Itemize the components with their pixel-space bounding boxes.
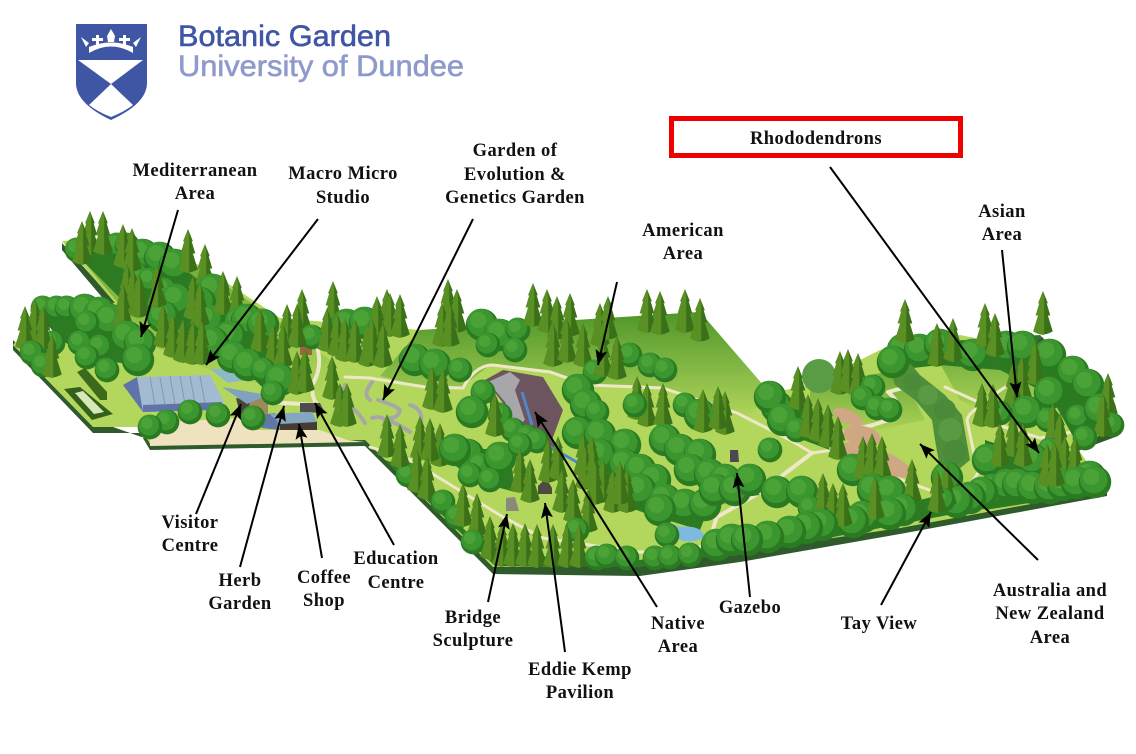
trees: upper and western forest: [15, 211, 397, 439]
label: Mediterranean Area: Area: [175, 184, 215, 204]
building: coffee shop: [260, 412, 317, 430]
label: Herb Garden: [208, 406, 284, 614]
label: Bridge Sculpture: [433, 514, 513, 651]
label: Tay View: Tay View: [841, 614, 917, 634]
label: Eddie Kemp Pavilion: Pavilion: [546, 683, 614, 703]
label: Asian Area: [978, 202, 1026, 397]
plaza and car park: [150, 418, 365, 446]
meadow: east lawn shading: [810, 370, 925, 440]
label: Coffee Shop: [297, 424, 351, 611]
meadow: left hillside shading: [70, 245, 330, 400]
label: Macro Micro Studio: [206, 164, 398, 365]
trees: central garden: [362, 279, 766, 570]
label: Garden of Evolution and Genetics Garden: Genetics Garden: [445, 188, 585, 208]
great hedge: [888, 357, 970, 470]
label: Native Area: Area: [658, 637, 698, 657]
illustrated garden map: [13, 211, 1124, 576]
label: Tay View: [841, 512, 931, 634]
meadow: Asian area lawn: [930, 345, 1100, 420]
label: Native Area: [535, 412, 705, 657]
building: education centre: [300, 403, 325, 413]
label: Bridge Sculpture: Bridge: [445, 608, 501, 628]
specimen tree: [802, 359, 836, 393]
label: Australia and New Zealand Area: Area: [1030, 628, 1070, 648]
label: Asian Area: Asian: [978, 202, 1026, 222]
label: Gazebo: Gazebo: [719, 598, 781, 618]
label: Asian Area: Area: [982, 225, 1022, 245]
label: Visitor Centre: Visitor: [162, 513, 218, 533]
formal garden: [64, 368, 113, 420]
genetics garden walls: [344, 382, 421, 432]
label: Australia and New Zealand Area: [920, 444, 1107, 648]
label: Herb Garden: Herb: [219, 571, 261, 591]
label: Garden of Evolution and Genetics Garden: Evolution &: [464, 165, 566, 185]
label: Visitor Centre: [162, 404, 241, 556]
label: Coffee Shop: Shop: [303, 591, 345, 611]
label: Bridge Sculpture: Sculpture: [433, 631, 513, 651]
meadow: upper lawn shading: [380, 312, 770, 420]
label: Rhododendrons highlighted: Rhododendrons: [750, 129, 882, 149]
label: American Area: Area: [663, 244, 703, 264]
pond near glasshouse: [210, 369, 246, 383]
label: Australia and New Zealand Area: Australia and: [993, 581, 1107, 601]
label: Garden of Evolution and Genetics Garden: [383, 141, 585, 400]
label: Herb Garden: Garden: [208, 594, 272, 614]
label: Rhododendrons highlighted: [672, 118, 1039, 453]
ground edge: [13, 243, 1122, 576]
label: Visitor Centre: Centre: [162, 536, 218, 556]
building: visitor centre: [222, 387, 268, 416]
heading: University of Dundee: University of Dundee: [178, 50, 464, 83]
label: Gazebo: [719, 473, 781, 618]
boulders: [831, 404, 916, 484]
label: Coffee Shop: Coffee: [297, 568, 351, 588]
icon: university shield: [76, 24, 147, 120]
label: Macro Micro Studio: Studio: [316, 188, 370, 208]
label: Native Area: Native: [651, 614, 705, 634]
label: Australia and New Zealand Area: New Zealand: [995, 604, 1105, 624]
pond: [658, 518, 704, 541]
paths: [268, 350, 1092, 552]
label: American Area: [598, 221, 724, 365]
label: Eddie Kemp Pavilion: [528, 503, 632, 703]
trees: eastern garden: [731, 291, 1124, 556]
label: Macro Micro Studio: Macro Micro: [288, 164, 398, 184]
label: Mediterranean Area: [132, 161, 258, 337]
dark forest masses: [20, 240, 1120, 567]
label: Mediterranean Area: Mediterranean: [132, 161, 258, 181]
label: Education Centre: Education: [353, 549, 439, 569]
heading: Botanic Garden: Botanic Garden: [178, 20, 391, 53]
label: American Area: American: [642, 221, 724, 241]
logo: Botanic Garden University of Dundee: [76, 20, 464, 120]
building: pavilion and gazebos: [299, 337, 1048, 511]
building: glasshouse: [123, 375, 224, 412]
label: Education Centre: Centre: [368, 573, 424, 593]
label: Education Centre: [315, 403, 439, 593]
label: Eddie Kemp Pavilion: Eddie Kemp: [528, 660, 632, 680]
label: Garden of Evolution and Genetics Garden: Garden of: [473, 141, 558, 161]
rock garden and waterfall: [485, 370, 608, 480]
ground surface: [13, 238, 1120, 567]
